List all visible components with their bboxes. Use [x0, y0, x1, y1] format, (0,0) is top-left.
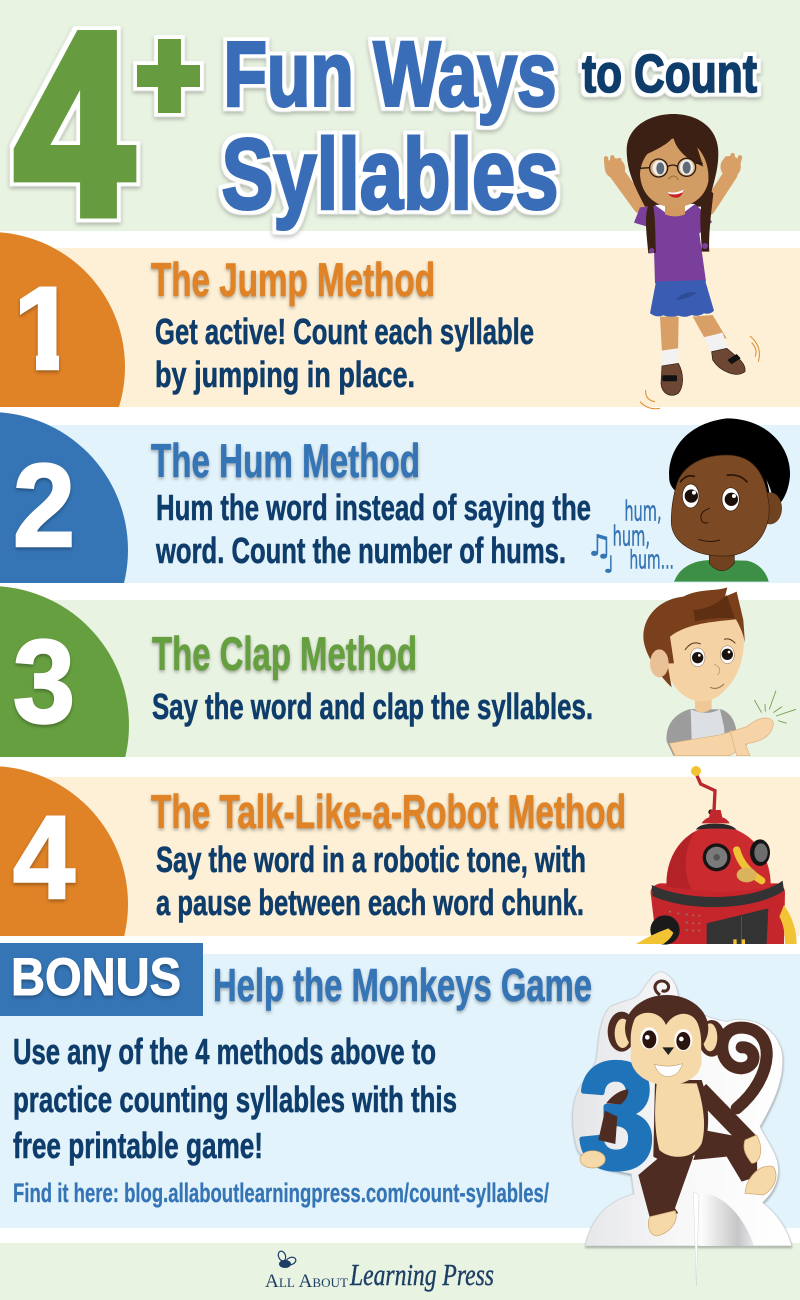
hum lettering: ♫: [586, 528, 612, 562]
method 1 text: by jumping in place.: [155, 354, 415, 395]
panel: bonus background: [0, 954, 800, 1228]
description: Say the word in a robotic tone, with: [156, 839, 586, 880]
bonus section text: practice counting syllables with this: [13, 1079, 457, 1120]
link: Find it here: blog.allaboutlearningpress.com/count-syllables/: [13, 1178, 549, 1208]
arms and clapping hands: [669, 718, 773, 756]
method 2 text: word. Count the number of hums.: [155, 530, 566, 571]
method 3 text: [152, 627, 593, 727]
limbs: [700, 1090, 752, 1143]
title line: to Count: to Count: [582, 44, 757, 104]
number badge 3: 3: [13, 616, 75, 748]
method 4 text: a pause between each word chunk.: [156, 882, 584, 923]
method 2 text: [151, 434, 591, 571]
illustration: jumping girl: [605, 114, 759, 409]
hum lettering: ♩: [603, 551, 614, 579]
blue number 3: 3: [579, 1031, 655, 1199]
description: Use any of the 4 methods above to: [13, 1031, 436, 1072]
bonus tag: BONUS: [11, 948, 181, 1007]
description: Get active! Count each syllable: [155, 311, 534, 352]
hum lettering: hum,: [613, 519, 650, 552]
number badge 1: 1: [12, 263, 77, 395]
description: Hum the word instead of saying the: [156, 487, 591, 528]
number badge 2: 2: [13, 440, 75, 572]
paper stand: [573, 972, 792, 1246]
panel: method 1 background: [0, 248, 800, 407]
number badge 1: [0, 232, 125, 407]
panel: footer background: [0, 1243, 800, 1300]
heading: The Hum Method: The Hum Method: [151, 434, 420, 487]
bonus section text: [0, 943, 592, 1208]
illustration: robot: [636, 766, 797, 945]
wordmark: [265, 1257, 494, 1292]
heading: The Jump Method: The Jump Method: [151, 253, 435, 306]
hum lettering: [586, 495, 674, 579]
hum lettering: hum,: [624, 495, 662, 528]
wordmark: All About: [265, 1271, 348, 1292]
wordmark: Learning Press: [349, 1257, 494, 1292]
plus sign: [137, 39, 200, 113]
title line: Fun Ways: Fun Ways: [224, 24, 556, 126]
raised arms: [605, 155, 741, 208]
number badge 4: [0, 766, 128, 936]
illustration: humming boy: [586, 418, 790, 582]
number badge 3: [0, 586, 129, 757]
shirt: [666, 709, 737, 756]
number badge 4: 4: [13, 792, 75, 924]
icon: bee: [277, 1250, 297, 1268]
method 4 text: [151, 785, 626, 923]
hum lettering: hum...: [629, 545, 674, 575]
panel: method 4 background: [0, 777, 800, 936]
head: [666, 613, 744, 701]
method 1 text: [151, 253, 534, 395]
heading: Help the Monkeys Game: Help the Monkeys Game: [213, 959, 592, 1011]
bonus section text: free printable game!: [13, 1125, 263, 1166]
tail: [722, 1028, 767, 1108]
illustration: monkey standee: [573, 972, 792, 1286]
title: [15, 0, 757, 268]
panel: method 2 background: [0, 425, 800, 583]
panel: method 3 background: [0, 600, 800, 757]
head: [608, 1012, 636, 1052]
panel: header background: [0, 0, 800, 231]
logo: [265, 1250, 494, 1292]
title line: Syllables: Syllables: [222, 118, 558, 230]
number badge 2: [0, 412, 128, 583]
illustration: clapping boy: [643, 587, 796, 756]
heading: The Clap Method: The Clap Method: [152, 627, 417, 680]
description: Say the word and clap the syllables.: [152, 686, 593, 727]
